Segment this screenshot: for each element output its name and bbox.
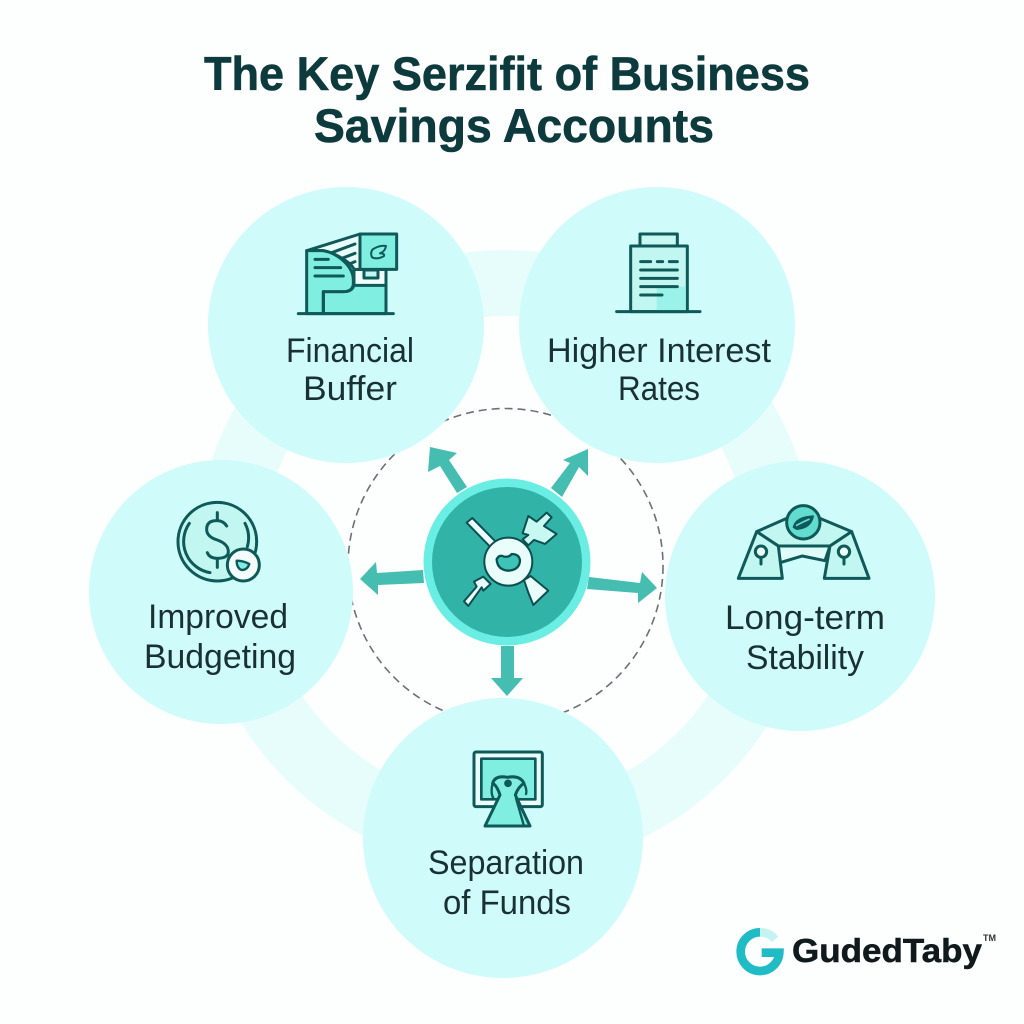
label: Higher Interest: [547, 332, 772, 370]
icon: dollar coin: [178, 502, 259, 581]
arrow: down: [491, 646, 523, 696]
title: The Key Serzifit of Business: [204, 47, 810, 100]
arrow: up left: [428, 447, 467, 493]
trademark: TM: [983, 933, 996, 943]
panel: improved budgeting: [89, 460, 353, 724]
arrow: up right: [551, 449, 588, 497]
label: Long-term: [725, 599, 885, 637]
icon: monitor with scales: [474, 752, 542, 826]
label: Stability: [746, 639, 864, 677]
icon: stability bridge: [738, 506, 869, 578]
label: Rates: [618, 370, 700, 408]
icon: hub connectors: [464, 513, 557, 606]
panel: higher interest rates: [519, 187, 795, 463]
icon: logo G: [741, 932, 779, 971]
panel: financial buffer: [208, 187, 484, 463]
label: Budgeting: [144, 638, 296, 676]
dashed orbit: [348, 408, 663, 724]
panel: long-term stability: [665, 461, 935, 731]
label: Buffer: [303, 370, 397, 408]
label: Improved: [148, 598, 288, 636]
panel: separation of funds: [363, 698, 643, 978]
icon: document: [617, 234, 700, 312]
central hub: [424, 478, 590, 646]
icon: financial building: [298, 234, 397, 314]
title: [204, 47, 810, 152]
label: Financial: [286, 332, 414, 370]
wordmark: GudedTaby: [792, 932, 983, 969]
arrow: left: [360, 562, 424, 595]
arrow: right: [587, 572, 657, 603]
label: of Funds: [443, 884, 571, 922]
title: Savings Accounts: [314, 99, 714, 152]
label: Separation: [428, 844, 584, 882]
logo: [741, 932, 996, 971]
